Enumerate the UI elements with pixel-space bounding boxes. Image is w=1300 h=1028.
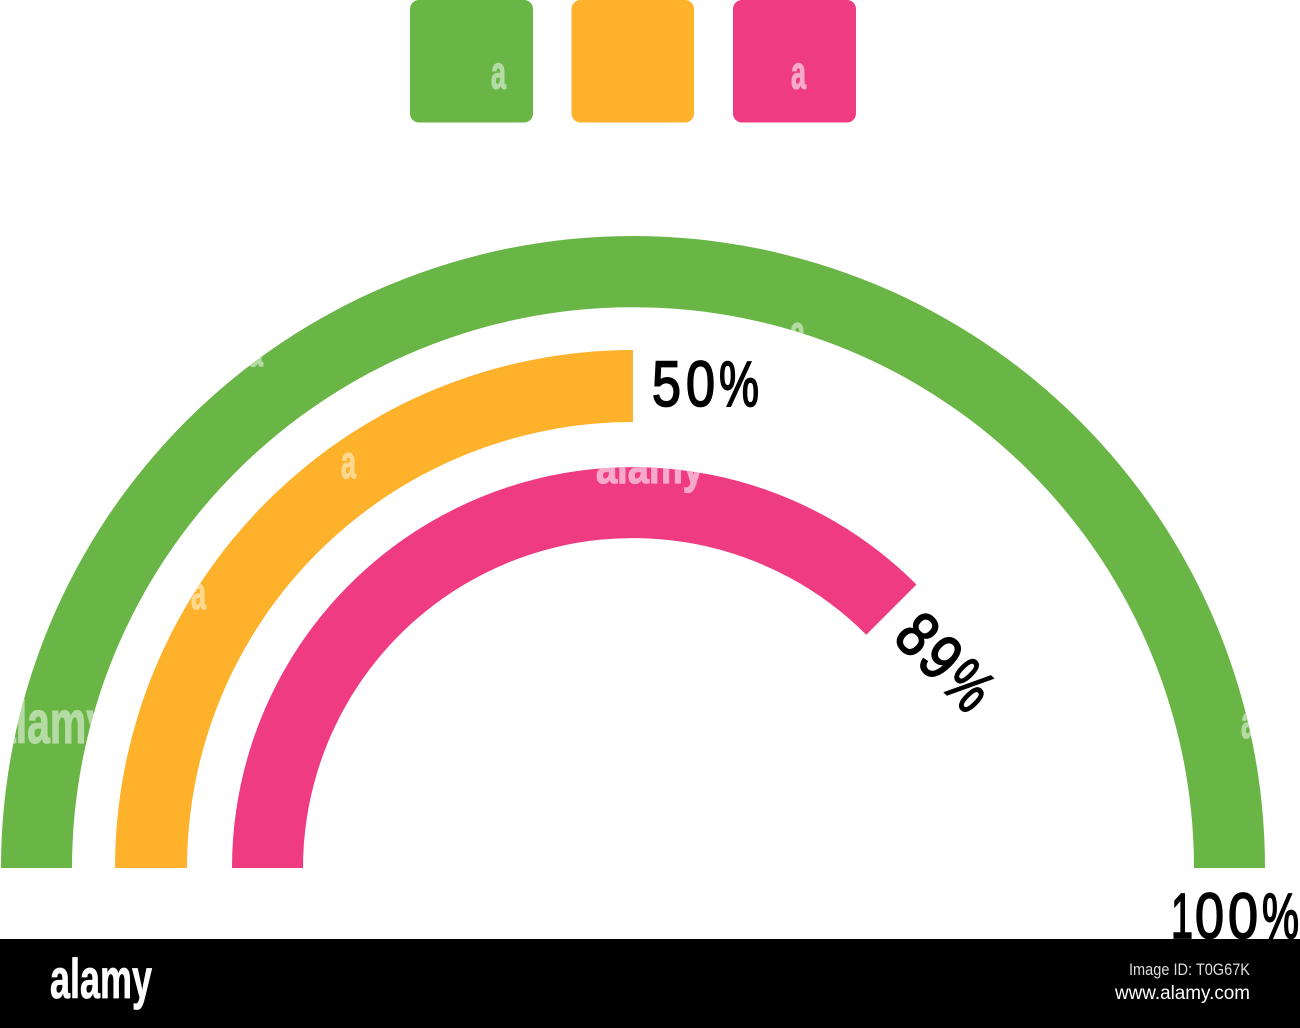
orange arc: 50%: a — [191, 567, 206, 619]
footer logo: alamy — [50, 947, 152, 1010]
label: 89%: 9 — [905, 621, 977, 694]
pink arc: 89% — [232, 441, 916, 868]
orange arc: 50% — [115, 350, 633, 868]
label: 100%: 0 — [1228, 880, 1258, 952]
green arc: 100%: a — [248, 324, 263, 376]
image id: Image ID: T0G67K — [1129, 960, 1251, 979]
label: 50%: % — [719, 348, 759, 420]
label: 100%: 1 — [1171, 880, 1193, 952]
label: 50%: 0 — [686, 348, 715, 420]
legend: pink square: a — [791, 46, 806, 98]
green arc: 100%: a — [1241, 696, 1256, 748]
legend: green square — [410, 0, 533, 122]
label: 50%: 5 — [652, 348, 681, 420]
green arc: 100% — [0, 236, 1265, 868]
label: 89%: 8 — [882, 598, 954, 670]
pink arc: 89%: alamy — [596, 441, 704, 493]
footer bar — [0, 939, 1300, 1028]
website: www.alamy.com — [1114, 983, 1250, 1004]
label: 89% — [882, 598, 1009, 725]
green arc: 100%: a — [790, 306, 805, 358]
label: 50% — [652, 348, 759, 420]
label: 89%: % — [929, 646, 1009, 725]
legend: green square: a — [491, 46, 506, 98]
legend: orange square — [572, 0, 694, 122]
label: 100%: 0 — [1195, 880, 1224, 952]
legend: pink square — [733, 0, 856, 122]
label: 100% — [1173, 892, 1298, 939]
orange arc: 50%: a — [341, 436, 356, 488]
